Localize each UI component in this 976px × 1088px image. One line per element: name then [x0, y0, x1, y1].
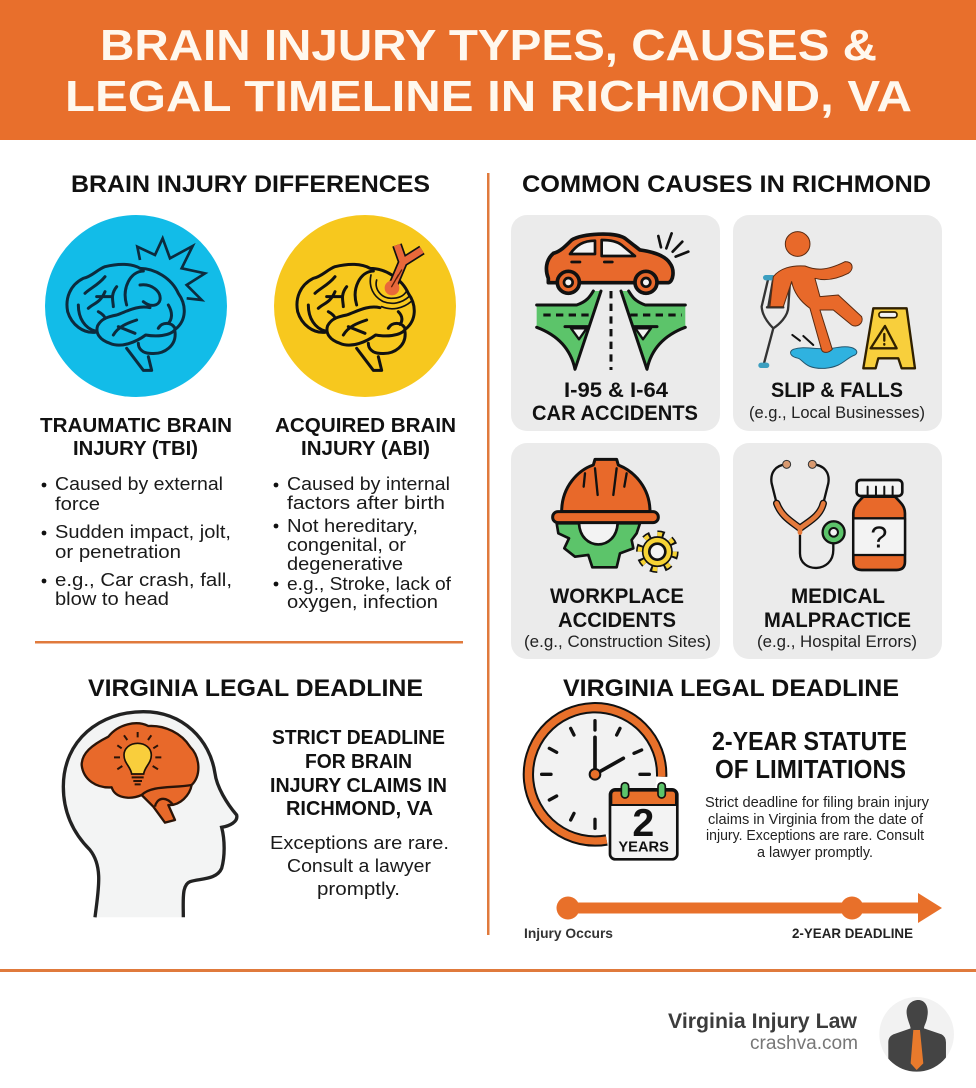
label: medical malpractice: MALPRACTICE [764, 609, 911, 632]
text: exceptions are rare: Consult a lawyer [287, 855, 431, 876]
bullet list: TBI: or penetration [55, 541, 181, 562]
text: strict deadline: RICHMOND, VA [286, 798, 433, 820]
heading: common causes: COMMON CAUSES IN RICHMOND [522, 171, 931, 198]
text: strict deadline: INJURY CLAIMS IN [270, 775, 447, 797]
bullet list: TBI: e.g., Car crash, fall, [55, 569, 232, 590]
bullet list: ABI: factors after birth [287, 492, 445, 513]
text: strict deadline: FOR BRAIN [305, 751, 412, 773]
bullet list: ABI: Not hereditary, [287, 515, 418, 536]
bullet list: TBI: Caused by external [55, 473, 223, 494]
heading: TBI: INJURY (TBI) [73, 438, 198, 460]
header banner [0, 0, 976, 140]
icon: acquired brain injury [274, 215, 456, 397]
footer brand text: Virginia Injury Law [668, 1010, 858, 1033]
text: statute description: Strict deadline for filing brain injury [705, 795, 930, 811]
icon: clock with 2 year calendar: YEARS [618, 839, 669, 855]
label: slip and falls: SLIP & FALLS [771, 379, 903, 402]
heading: brain injury differences: BRAIN INJURY DIFFERENCES [71, 171, 430, 198]
label: slip and falls [749, 379, 925, 422]
bullet list: ABI [274, 473, 452, 612]
icon: clock with 2 year calendar: 2 [632, 801, 654, 845]
heading: TBI [40, 415, 232, 460]
card: car accidents [511, 215, 720, 431]
bullet list: TBI: Sudden impact, jolt, [55, 521, 231, 542]
label: car accidents: CAR ACCIDENTS [532, 402, 698, 425]
label: workplace accidents: WORKPLACE [550, 585, 684, 608]
icon: person slipping [761, 232, 915, 368]
text: statute description: injury. Exceptions are rare. Consult [706, 828, 924, 844]
title: LEGAL TIMELINE IN RICHMOND, VA [65, 72, 912, 121]
icon: head with brain and lightbulb [63, 712, 237, 917]
bullet list: TBI: blow to head [55, 588, 169, 609]
heading: 2-year statute of limitations: OF LIMITATIONS [715, 754, 906, 784]
heading: TBI: TRAUMATIC BRAIN [40, 415, 232, 437]
label: workplace accidents: ACCIDENTS [558, 609, 676, 632]
heading: 2-year statute of limitations [712, 726, 907, 784]
label: car accidents: I-95 & I-64 [564, 379, 668, 402]
bullet list: TBI [42, 473, 232, 609]
bullet list: ABI: congenital, or [287, 534, 406, 555]
text: statute description [705, 795, 930, 861]
column: acquired brain injury [274, 415, 456, 612]
heading: ABI: INJURY (ABI) [301, 438, 430, 460]
heading: 2-year statute of limitations: 2-YEAR STATUTE [712, 726, 907, 756]
text: exceptions are rare [270, 832, 449, 899]
icon: stethoscope and pill bottle [771, 460, 905, 570]
label: medical malpractice: MEDICAL [791, 585, 885, 608]
footer brand text: crashva.com [750, 1033, 858, 1054]
bullet list: ABI: degenerative [287, 553, 403, 574]
footer [668, 997, 954, 1075]
heading: ABI [275, 415, 456, 460]
title [65, 21, 912, 121]
footer brand text [668, 1010, 858, 1054]
heading: ABI: ACQUIRED BRAIN [275, 415, 456, 437]
text: statute description: a lawyer promptly. [757, 845, 873, 861]
bullet list: ABI: oxygen, infection [287, 591, 438, 612]
text: exceptions are rare: Exceptions are rare. [270, 832, 449, 853]
icon: traumatic brain injury [45, 215, 227, 397]
icon: stethoscope and pill bottle: ? [870, 520, 887, 554]
label: workplace accidents: (e.g., Construction Sites) [524, 633, 711, 651]
label: injury occurs: Injury Occurs [524, 925, 613, 941]
label: car accidents [532, 379, 698, 425]
text: statute description: claims in Virginia from the date of [708, 812, 924, 828]
icon: attorney avatar [879, 997, 954, 1075]
text: exceptions are rare: promptly. [317, 878, 400, 899]
label: 2-year deadline: 2-YEAR DEADLINE [792, 925, 913, 941]
icon: car on highway [537, 233, 688, 370]
column: traumatic brain injury [40, 415, 232, 609]
label: slip and falls: (e.g., Local Businesses) [749, 404, 925, 422]
card: workplace accidents [511, 443, 720, 659]
icon: hard hat and gears [553, 459, 675, 569]
label: medical malpractice [757, 585, 917, 651]
bullet list: TBI: force [55, 493, 100, 514]
text: strict deadline: STRICT DEADLINE [272, 727, 445, 749]
card: medical malpractice [733, 443, 942, 659]
heading: virginia legal deadline: VIRGINIA LEGAL DEADLINE [563, 675, 899, 702]
bullet list: ABI: e.g., Stroke, lack of [287, 573, 452, 594]
panel: virginia legal deadline left [63, 675, 449, 917]
text: strict deadline [270, 727, 447, 820]
panel: virginia legal deadline right [524, 675, 942, 941]
arrow: timeline [556, 893, 942, 923]
title: BRAIN INJURY TYPES, CAUSES & [100, 21, 877, 70]
icon: clock with 2 year calendar [528, 708, 677, 859]
card: slip and falls [733, 215, 942, 431]
panel: brain injury differences [40, 171, 456, 612]
label: medical malpractice: (e.g., Hospital Errors) [757, 633, 917, 651]
bullet list: ABI: Caused by internal [287, 473, 450, 494]
panel: common causes in richmond [511, 171, 942, 659]
heading: virginia legal deadline: VIRGINIA LEGAL DEADLINE [88, 675, 423, 702]
label: workplace accidents [524, 585, 711, 651]
